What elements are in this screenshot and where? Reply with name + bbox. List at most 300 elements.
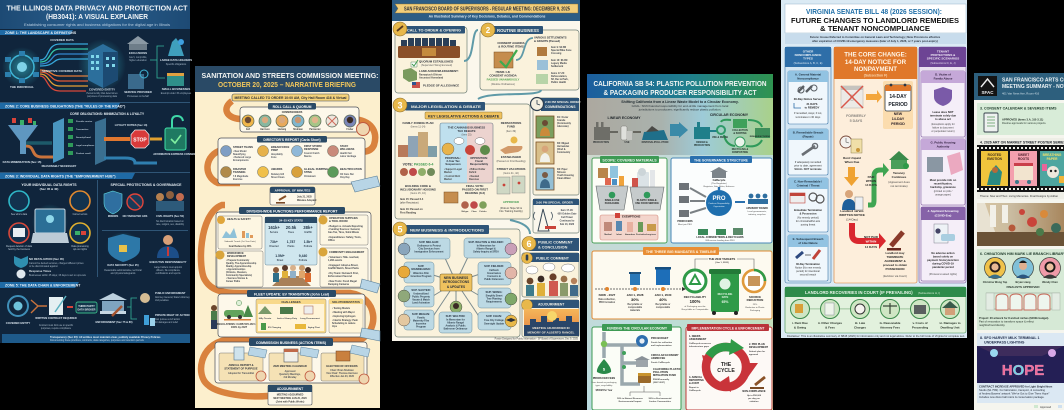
- section: commission business: Vice Chair: Thomas Harrison: [326, 373, 358, 375]
- timeline: materials: [630, 309, 641, 312]
- bubble: Walton: SUP. WALTON:: [446, 314, 465, 318]
- bubble: Wong: Requirements: [486, 300, 503, 304]
- section: director's report: ILLEGAL DUMPING: [304, 167, 328, 171]
- timeline: 40%: [659, 297, 667, 302]
- section: consent calendar: [977, 103, 1064, 135]
- section: Chinatown library: neighborhood identity.: [979, 323, 1006, 327]
- section 1: call to order: [393, 22, 467, 93]
- section: funding the circular economy: and implementation: [651, 344, 672, 347]
- section: SFO Harvey Milk terminal: Includes new disco ball rotors & conservation package.: [979, 395, 1045, 399]
- flow: rent unpaid to landlord notice: [839, 136, 865, 222]
- flow: paid within 14 days: Tenancy: [893, 171, 905, 175]
- poster: rooted emotion: ROOTED: [988, 153, 1002, 157]
- card C: Criminal / Threat: [797, 184, 819, 188]
- item: family zoning plan: First Reading: [400, 212, 416, 214]
- zone 3 heading: ZONE 3: INDIVIDUAL DATA RIGHTS (THE "EMPOWERMENT HUB"): [5, 174, 116, 178]
- section: director's report: BREAKFORCE: [271, 145, 290, 149]
- timeline: NOW - 2027: [599, 293, 616, 297]
- section 5: new business and introductions: [393, 222, 520, 337]
- section: 2:30 pm special order commendations: Advocate): [557, 125, 569, 128]
- item: family zoning plan: (after Rescission): [400, 202, 419, 204]
- icon: service provider, exclusions, holders and small business: SERVICE PROVIDER: [124, 90, 152, 94]
- card J: (COVID-Era): [935, 214, 951, 218]
- section: 2:30 pm special order commendations: (Chef &: [557, 148, 566, 151]
- arrow: five days to fourteen days: [866, 90, 882, 103]
- section: 3:00 pm special order: 650 Golden Gate: [558, 212, 577, 216]
- icon: service provider, exclusions, holders and small business: Processes on behalf: [127, 95, 149, 98]
- card C: & Possession: [799, 212, 817, 216]
- column: other noncompliance types: NONCOMPLIANCE: [795, 53, 821, 57]
- section: governance structure: industry, recyclers: [748, 213, 767, 216]
- section: commission business: Chair: Brian Shulman: [330, 370, 354, 372]
- item: reparations fund and street vacations: Fire Training Facility): [499, 210, 523, 213]
- section: implementation cycle and enforcement: [686, 324, 772, 410]
- section: governance structure: PRODUCERS: [677, 220, 693, 223]
- diagram: data minimization funnel to stop sign and lock: Transaction: [76, 128, 89, 131]
- card J: based solely on: [933, 254, 953, 258]
- section: funding the circular economy: (2027-2037): [653, 382, 665, 384]
- bubble: Wong: Tree Planting: [486, 298, 502, 300]
- panel: San Francisco Arts Commission summary: [974, 73, 1064, 410]
- icon: gavel and eviction outcome: (Eviction via Court): [883, 274, 907, 278]
- bubble: Walton and Fielder: Alberto Rangel &: [476, 248, 496, 250]
- section: director's report: AWARDS: [271, 167, 283, 171]
- section: governance structure: Registers, Sets Rules, Enforces: [704, 185, 735, 188]
- intro: linear to circular economy: Shifting California from a Linear Waste Model to a Circular Economy.: [621, 100, 739, 104]
- section: funding the circular economy: CIRCULAR ECONOMY: [651, 353, 679, 357]
- title banner: [392, 0, 580, 21]
- column: other noncompliance types: (Subsections A, B, C, E): [794, 61, 823, 65]
- column: the core change: THE CORE CHANGE:: [844, 52, 907, 58]
- bubble: Chan: Oversight Update: [484, 322, 505, 326]
- section: special protections and governance: No discrimination based on: [156, 220, 185, 223]
- poster: rooted emotion: [981, 151, 1008, 186]
- card: stats: 24–25 KEY STATS: [279, 218, 303, 222]
- section 3: major legislation and debate: [393, 98, 530, 219]
- section: director's report: Basins: [304, 156, 312, 158]
- card: stats: Pothole: [299, 259, 308, 262]
- bubble: Chan: SUP. CHAN:: [486, 314, 502, 318]
- card: stats: Diverted: [269, 245, 279, 248]
- bubble: Fielder: Governance: [487, 272, 502, 275]
- card: health and safety: HEALTH & SAFETY: [227, 217, 251, 221]
- card G: recertification,: [934, 182, 953, 186]
- box: new business center: INTRODUCTIONS: [443, 280, 469, 284]
- section: SFO Harvey Milk terminal: CONTRACT INCREASE APPROVED for Light Bright Neon: [979, 384, 1053, 388]
- bubble: Chan: [478, 312, 517, 330]
- panel: California SB 54 plastic pollution act: [587, 74, 773, 410]
- poster: breathing paper: [1040, 151, 1064, 186]
- icon: gavel and eviction outcome: proceed to obtain: [883, 263, 907, 267]
- card: stats: 1.5k+: [304, 240, 312, 244]
- section: director's report: STING: [304, 170, 312, 174]
- timeline: Recyclable or: [656, 304, 671, 306]
- bubble: Fielder: Public Extension: [484, 278, 504, 281]
- section: art on Market Street poster series: [977, 138, 1064, 199]
- card: operation supplies: • Budget vs. Actuals Reporting: [328, 225, 363, 228]
- panel: Virginia Senate Bill 48: [781, 0, 967, 338]
- item: family zoning plan: VOTE: PASSED 6-4: [403, 162, 434, 166]
- diagram: data minimization funnel to stop sign and lock: REASONABLY NECESSARY: [42, 164, 77, 168]
- flow: rent unpaid to landlord notice: Landlord serves: [840, 209, 864, 213]
- card: community engagement: [318, 248, 368, 287]
- status strip: Future: House Referred to Committee on General Laws and Technology | New Provisions effective: [810, 35, 941, 39]
- legend: Approved: [1040, 405, 1052, 409]
- title banner: (HB3041): A VISUAL EXPLAINER: [46, 12, 149, 21]
- section: implementation cycle and enforcement: per day per: [748, 398, 760, 400]
- section 2: routine business: Legacy Media: [551, 62, 567, 65]
- card: stats: 73k+: [270, 240, 278, 244]
- card: solutions: SOLUTIONS/STATUS: [332, 300, 360, 304]
- diagram: linear economy: DISPOSAL/POLLUTION: [642, 141, 669, 144]
- card B: If adequately remedied: [795, 160, 822, 164]
- diagram: circular economy: COMPOSTING: [732, 151, 748, 154]
- item: reparations fund and street vacations: (Potrero Hope SF &: [500, 207, 522, 210]
- section: funding the circular economy: Funds fee collection: [651, 341, 673, 344]
- icon: gavel and eviction outcome: TERMINATE: [887, 255, 903, 259]
- section: roll call: ROLL CALL & QUORUM: [273, 105, 312, 109]
- icon: gavel and eviction outcome: Landlord may: [886, 251, 905, 255]
- intro: linear to circular economy: GOAL: Shift financial responsibility for end-of-life management from local: [632, 104, 729, 108]
- card G: Authority: [937, 144, 950, 148]
- bubble: Chan: Free City College: [484, 319, 504, 322]
- section: individual data rights: or be discriminated against: [29, 265, 58, 268]
- card: solutions: trips: [332, 325, 338, 328]
- 2032 targets: RATE: [722, 296, 729, 299]
- flow: rent unpaid to landlord notice: (14-Day): [846, 218, 858, 222]
- section 2: routine business: ROUTINE BUSINESS: [497, 28, 539, 33]
- section: landlord recoveries: v. Costs of: [912, 321, 928, 325]
- card: community engagement: • Volunteers: 59k+ reached,: [328, 256, 359, 259]
- section: individual data rights: See who's data: [11, 213, 28, 216]
- section: roll call: Fisher: [347, 129, 354, 131]
- icon: plastic food service bucket: USE FOOD SERVICE: [635, 202, 659, 205]
- diagram: data chain and enforcement: purposes, require compliance: [41, 327, 72, 330]
- section: landlord recoveries: iii. Late: [855, 321, 865, 325]
- section: 3:00 pm special order: Continued to: [560, 220, 575, 222]
- section: governance structure: LOCAL JURISDICTIONS & RECYCLERS: [696, 236, 744, 239]
- item: cannabis business tax debate: Fielder: [479, 211, 487, 213]
- section: scope covered materials: [592, 156, 667, 243]
- poster: sweet roots: [1010, 151, 1037, 186]
- diagram: data minimization funnel to stop sign and lock: Product recall: [76, 152, 91, 155]
- section: individual data rights: Response Times: [29, 269, 52, 273]
- section: fleet update: 100% by 2027: [231, 326, 248, 329]
- card: community engagement: Enforcement Second: [328, 275, 352, 278]
- card: community engagement: COMMUNITY ENGAGEMENT: [329, 250, 365, 254]
- diagram: circular economy: DESIGN &: [696, 141, 708, 144]
- section: individual data rights: YOUR INDIVIDUAL DATA RIGHTS: [21, 183, 77, 187]
- card: new 14-day period: PERIOD: [888, 102, 908, 108]
- section: roll call: Shulman: [293, 129, 303, 131]
- footer credit: Poster Designed for Public Information - SF Board of Supervisors, Dec 9, 2025: [495, 338, 579, 340]
- card: challenges: EV Charging: [268, 327, 282, 329]
- item: cannabis business tax debate: Chan: [471, 211, 477, 213]
- item: family zoning plan: FAMILY ZONING PLAN: [402, 121, 434, 125]
- section: adjournment: NEXT MEETING JAN 20, 2026: [273, 397, 307, 400]
- card: solutions: [329, 299, 363, 333]
- section: approval of minutes: APPROVAL OF MINUTES: [275, 188, 310, 192]
- section: individual data rights: Request deletion of data: [6, 245, 33, 248]
- item: family zoning plan: (Items 15, 16): [410, 192, 426, 195]
- zone 2 heading: [0, 102, 190, 109]
- card D: D. Victim of: [935, 72, 951, 76]
- icon: service provider, exclusions, holders and small business: Specific obligations: [166, 63, 187, 66]
- icon: single-use packaging bucket: PACKAGING: [605, 202, 619, 205]
- card D: [921, 71, 965, 137]
- section: director's report: • Reduced Large: [233, 157, 252, 159]
- flow: paid within 14 days: not terminate): [890, 184, 908, 188]
- section: governance structure: PRO: [712, 196, 726, 202]
- section: special protections and governance: Reasonable administrative, technical: [104, 269, 142, 272]
- card: stats: Trees: [288, 232, 295, 234]
- section: director's report: Clay Day: [340, 177, 350, 179]
- section: Chinatown library: Christine Wong Yap: [983, 280, 1008, 284]
- card: stats: Graffiti: [304, 231, 312, 234]
- title banner: [0, 0, 190, 29]
- diagram: the individual and data flows: [2, 38, 90, 91]
- 2032 targets: 25%: [753, 304, 757, 306]
- card: exemptions: [600, 213, 658, 240]
- card: stats: Street: [277, 259, 283, 262]
- section: governance structure: Organization: [713, 205, 725, 208]
- poster: sweet roots: SWEET: [1018, 153, 1029, 157]
- item: cannabis business tax debate: Deficit: [469, 171, 477, 174]
- card B: (Repair): [803, 134, 813, 138]
- illustration: supervisors dais: [398, 38, 460, 58]
- bubble: Walton and Fielder: Safety Inquiry at SFDA: [473, 250, 499, 254]
- section: director's report: Hospitality: [271, 153, 283, 156]
- item: cannabis business tax debate: Responsibility: [470, 162, 489, 166]
- section: special protections and governance: and physical safeguards: [111, 272, 136, 275]
- flow: paid within 14 days: WITHIN: [866, 179, 876, 183]
- section: funding the circular economy: Funds CalRecycle: [651, 362, 671, 364]
- section: implementation cycle and enforcement: violation: [750, 400, 759, 403]
- status strip: [785, 34, 966, 44]
- card J: during COVID-19: [932, 262, 954, 266]
- section: director's report: STAFF: [340, 144, 349, 148]
- meeting called pill: MEETING CALLED TO ORDER 10:00 AM, City Hall Room 416 & Virtual: [234, 96, 347, 100]
- section: commission business: COMMISSION BUSINESS (ACTION ITEMS): [256, 341, 326, 345]
- card C: Immediate Termination: [794, 208, 823, 212]
- column: tenant protections: [919, 47, 966, 283]
- section: implementation cycle and enforcement: 4. ANNUAL: [689, 376, 703, 379]
- section 2: routine business: & ROUTINE ITEMS: [498, 44, 524, 48]
- card J: (Process to assert rights): [929, 273, 957, 276]
- flow: not paid within 14 days: [852, 223, 886, 249]
- section: SFO Harvey Milk terminal: Studio ($1.75M). For fabrication, transport, & consulting: [979, 388, 1046, 392]
- section: commission business: STATEMENT OF PURPOSE: [224, 366, 258, 370]
- card: exemptions: Medical: [604, 234, 612, 236]
- column: the core change: 14-DAY NOTICE FOR: [845, 59, 907, 66]
- section: commission business: [215, 338, 370, 384]
- diagram: data chain and enforcement: WRITTEN CONTRACT REQUIRED: [35, 316, 77, 320]
- diagram: linear economy: [593, 116, 669, 144]
- section: commission business: Approved: [285, 370, 296, 373]
- section: implementation cycle and enforcement: 1. NEEDS: [689, 335, 701, 338]
- section: commission business: ANNUAL REPORT &: [228, 363, 254, 367]
- section: adjournment: (Joint with Public Works): [276, 400, 304, 404]
- section: commission business: Quarterly Meetings,: [279, 373, 301, 376]
- 2032 targets: 100%: [690, 299, 701, 304]
- card D: Family Abuse: [934, 76, 953, 80]
- card: workforce development: WORKFORCE: [227, 252, 244, 255]
- section: landlord recoveries: & Owing: [794, 326, 806, 330]
- section 6: public comment and conclusion header: [522, 236, 579, 251]
- card C: C. Non-Remediable /: [794, 180, 822, 184]
- section: director's report: • New Model: [233, 151, 247, 153]
- bubble: Fielder: SUP. FIELDER:: [484, 264, 504, 268]
- section: implementation cycle and enforcement: NON-COMPLIANCE: [742, 390, 766, 393]
- card E: 30-Day Termination: [796, 262, 820, 266]
- card: challenges: [256, 299, 326, 333]
- item: cannabis business tax debate: • Control Illicit: [444, 175, 460, 178]
- section: 2:30 pm special order commendations: Grande: [557, 119, 566, 122]
- section: special protections and governance: EXECUTIVE RESPONSIBILITY: [149, 260, 187, 264]
- section: 2:30 pm special order commendations: D3: Piper: [557, 168, 568, 171]
- section: Chinatown library: 6. CHINATOWN HIM MARK LIE BRANCH LIBRARY: [980, 252, 1064, 256]
- card D: Lease does NOT: [932, 110, 954, 114]
- section: director's report: PREP: [271, 148, 278, 152]
- item: cannabis business tax debate: THE CANNABIS BUSINESS: [448, 126, 485, 130]
- section: director's report: Beautifying: [233, 153, 246, 156]
- panel: Illinois data privacy act explainer: [0, 0, 197, 343]
- section: special protections and governance: Large holders must appoint: [154, 266, 182, 269]
- section: director's report: Labor Heritage: [340, 155, 357, 158]
- section 3: major legislation and debate: 3: [397, 100, 403, 110]
- section 6: public comment and conclusion header: & CONCLUSION: [538, 246, 568, 250]
- item: cannabis business tax debate: PROPOSAL:: [445, 156, 461, 160]
- section: implementation cycle and enforcement: REPORTING: [689, 379, 704, 382]
- card: workforce development: Quality, The Apprenticeship: [226, 262, 257, 265]
- section 5: new business and introductions: 5: [397, 224, 403, 234]
- bubble: Mandelman: SUP.: [418, 264, 424, 268]
- flow: paid within 14 days: PAID: [868, 175, 874, 179]
- section: landlord recoveries: Charges: [854, 326, 866, 330]
- box: new business center: NEW BUSINESS: [444, 276, 468, 280]
- item: family zoning plan: BUILDING CODE &: [405, 184, 431, 188]
- diagram: circular economy: CIRCULAR ECONOMY: [710, 113, 749, 117]
- section: landlord recoveries: & Fees: [825, 326, 835, 330]
- section: landlord recoveries: vi. Damages to: [939, 321, 961, 325]
- card: workforce development: Career Paths: [226, 280, 241, 283]
- card: challenges: Lack of Heavy-Duty: [277, 317, 298, 320]
- section 2: routine business: Public Health: [551, 81, 567, 84]
- section: adjournment: MEMORY OF ALBERTO RANGEL: [527, 330, 575, 334]
- card E: Notice (No new remedy: [795, 266, 822, 270]
- section: implementation cycle and enforcement: & AUDIT: [689, 382, 700, 385]
- icon: gavel and eviction outcome: POSSESSION: [886, 267, 904, 271]
- section: special protections and governance: race, religion, sex, disability: [156, 223, 185, 226]
- bubble: Fielder: Calfresh: [489, 269, 499, 272]
- card A: 30-Day Notice Served: [794, 97, 823, 101]
- section: 2:30 pm special order commendations: 2:30 PM SPECIAL ORDER: [545, 100, 581, 104]
- section: consent calendar: Routine approvals for various projects.: [1002, 121, 1047, 125]
- section: implementation cycle and enforcement: Submit plan for: [749, 350, 765, 353]
- card: workforce development: DEVELOPMENT: [227, 255, 247, 258]
- section: director's report: Zone: [271, 157, 277, 159]
- section 3: major legislation and debate: MAJOR LEGISLATION & DEBATE: [411, 104, 481, 109]
- panel: San Francisco Board of Supervisors meeting: [392, 0, 581, 341]
- icon: service provider, exclusions, holders and small business: Exempt under 15 employees: [161, 92, 192, 95]
- diagram: circular economy: [694, 113, 771, 154]
- 2032 targets: Recyclable or Compostable: [682, 308, 709, 311]
- flow: paid within 14 days: Continues: [892, 175, 907, 179]
- section 1: call to order: QUORUM ESTABLISHED: [419, 60, 453, 64]
- item: cannabis business tax debate: TAX DEBATE: [457, 129, 476, 133]
- section: consent calendar: APPROVED (Items 3.A, 3.B-3.11): [1002, 118, 1043, 122]
- section: funding the circular economy: 50% to Natural Resource: [617, 397, 644, 400]
- card A: Noncompliance: [797, 76, 819, 80]
- card B: prior to date, agreement: [794, 164, 822, 168]
- diagram: circular economy: & SORTING: [733, 132, 747, 135]
- section: commission business: Effective Jan 20, 2026: [330, 375, 355, 378]
- section: funding the circular economy: CALIFORNIA PLASTIC: [653, 367, 681, 371]
- icon: service provider, exclusions, holders and small business: Gov't, nonprofits,: [129, 56, 147, 59]
- section: commission business: 2026 MEETING CALENDAR: [273, 364, 307, 368]
- section: 2:30 pm special order commendations: COMMENDATIONS: [545, 105, 576, 109]
- section: individual data rights: [6, 183, 90, 278]
- diagram: data chain and enforcement: Attorney General, State's Attorney: [155, 296, 191, 299]
- icon: checked box: [494, 50, 517, 68]
- timeline: compostable: [656, 306, 671, 309]
- bubble: Megan: SUP. MEGAN:: [412, 312, 430, 316]
- card: challenges: Hilly Terrain: [259, 318, 272, 320]
- card: operation supplies: • Expenditures: Safety, Tools,: [328, 236, 362, 239]
- section: approval of minutes: [270, 187, 317, 205]
- card: solutions: • Meeting with Mayor: [332, 311, 355, 314]
- bubble: Megan: Family: [417, 316, 425, 320]
- section 2: routine business: SF, Rec & Park,: [551, 78, 569, 81]
- card E: [788, 235, 828, 281]
- section 1: call to order: CALL TO ORDER & OPENING: [407, 28, 461, 32]
- section: governance structure: ADVISORY BOARD: [746, 207, 768, 210]
- intro: linear to circular economy: jurisdictions to producers; significantly reduce plastic pollution.: [638, 108, 721, 112]
- card: exemptions: Infant: [616, 233, 622, 236]
- icon: gavel and eviction outcome: AGREEMENT &: [884, 259, 906, 263]
- card B: B. Remediable Breach: [793, 130, 823, 134]
- section: public comment: PUBLIC COMMENT: [536, 256, 570, 260]
- section: special protections and governance: NO TARGETED ADS: [123, 214, 148, 218]
- diagram: data minimization funnel to stop sign and lock: STOP: [133, 138, 147, 144]
- section: implementation cycle and enforcement: 2. PRO PLAN: [749, 343, 765, 346]
- flow: rent unpaid to landlord notice: WRITTEN NOTICE: [839, 213, 865, 217]
- item: reparations fund and street vacations: REPARATIONS: [501, 121, 521, 125]
- diagram: the cycle: [702, 339, 758, 392]
- card G: hardship, grievance: [930, 185, 956, 189]
- section 1: call to order: LAND ACKNOWLEDGEMENT:: [419, 69, 459, 73]
- timeline: compostable: [628, 306, 643, 309]
- bubble: Sauter: Land Activation: [412, 302, 430, 304]
- item: cannabis business tax debate: PASSED ON FIRST: [462, 188, 488, 192]
- section: director's report: BEAUTIFICATION: [340, 167, 362, 171]
- diagram: data chain and enforcement: PUBLIC ENFORCEMENT: [155, 291, 186, 295]
- item: cannabis business tax debate: Market: [444, 171, 452, 174]
- bubble: Fielder: [478, 262, 517, 285]
- section: commission business: ELECTION OF OFFICERS: [326, 364, 358, 368]
- bubble: Mandelman: Waterloo Film: [413, 272, 429, 275]
- section: funding the circular economy: $500M annually: [653, 379, 670, 381]
- title box: VIRGINIA SENATE BILL 48 (2026 SESSION):: [806, 9, 942, 16]
- section: 3:00 pm special order: [533, 199, 579, 233]
- card: health and safety: Goal Reduce by 20%: [229, 246, 251, 248]
- section: special protections and governance: MINORS: [108, 214, 118, 218]
- section 5: new business and introductions: NEW BUSINESS & INTRODUCTIONS: [410, 228, 484, 232]
- bubble: Walton: Analysis & Public: [445, 324, 466, 328]
- section: governance structure: Local governments,: [747, 210, 767, 213]
- card: stats: Service: [270, 232, 279, 234]
- card: stats: 38k+: [303, 225, 313, 230]
